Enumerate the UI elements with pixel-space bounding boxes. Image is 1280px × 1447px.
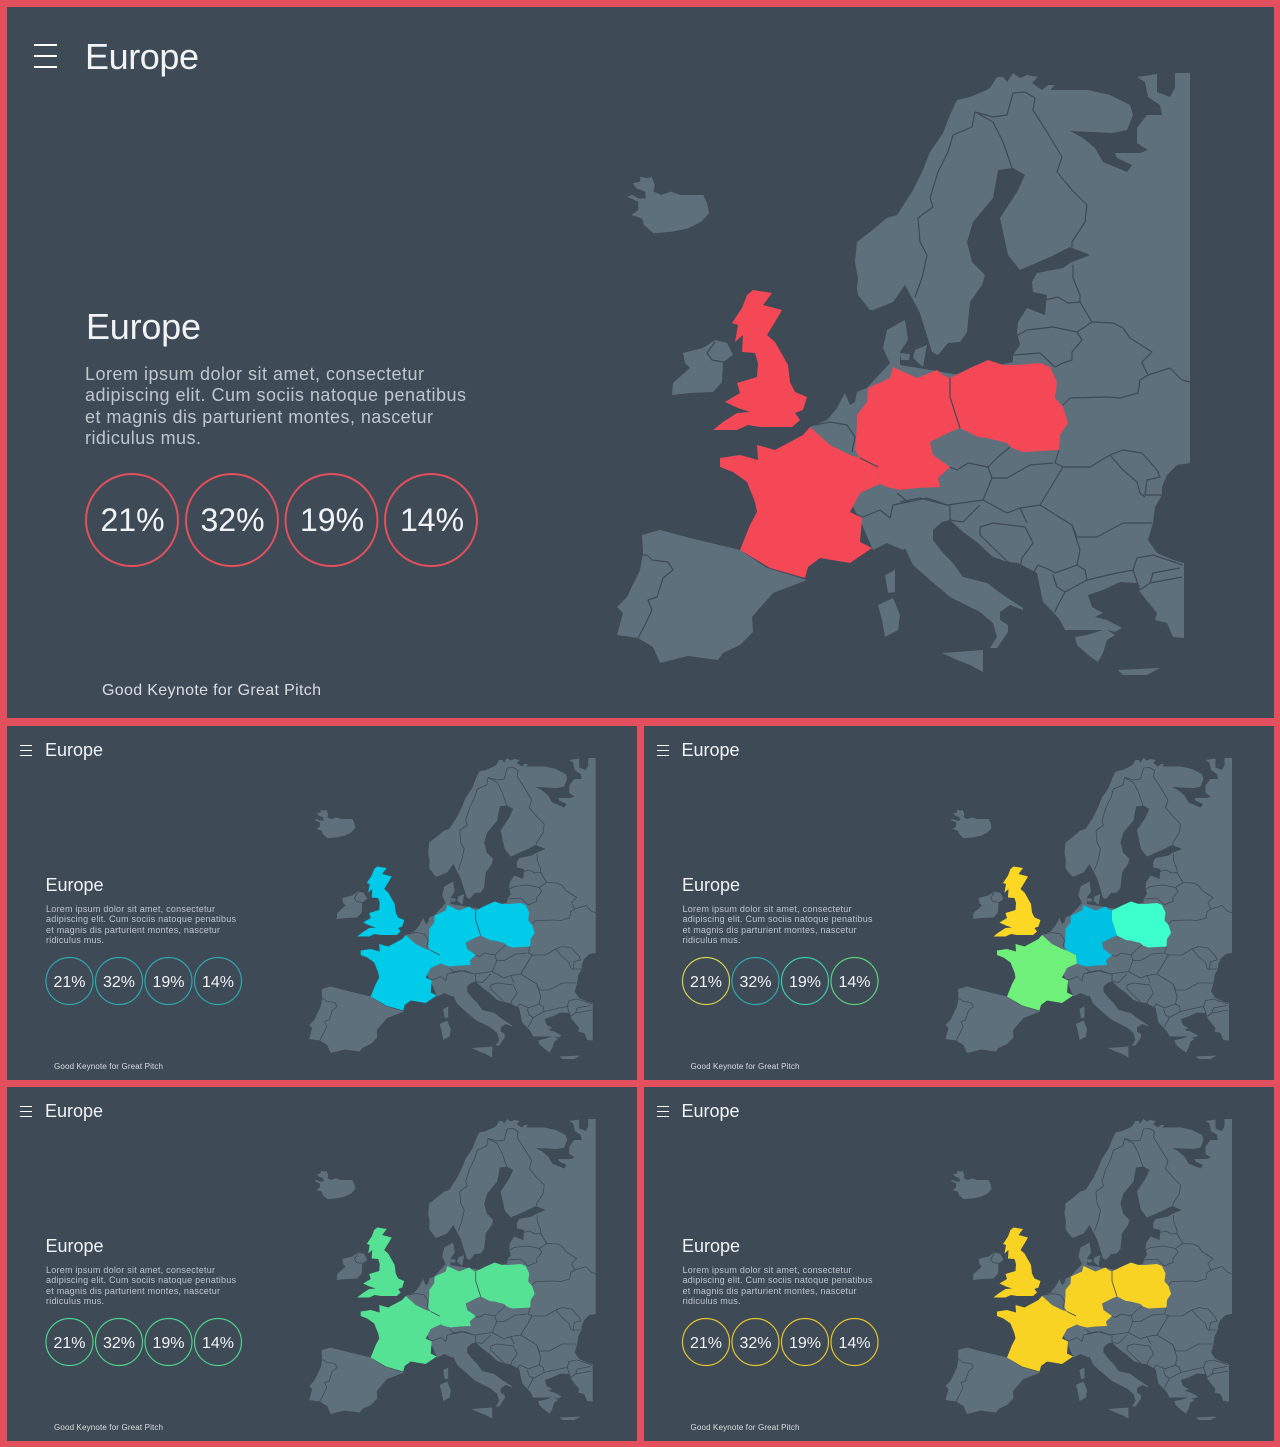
text block: et magnis dis parturient montes, nascetur xyxy=(85,407,433,427)
percentage values: 19% xyxy=(789,1335,821,1352)
icon: menu xyxy=(34,44,57,68)
text block: Lorem ipsum dolor sit amet, consectetur xyxy=(46,904,215,914)
text block xyxy=(682,1265,873,1306)
text block: et magnis dis parturient montes, nascetur xyxy=(682,1286,856,1296)
icon: menu xyxy=(657,1106,669,1117)
percentage values: 21% xyxy=(53,1335,86,1352)
text block: Lorem ipsum dolor sit amet, consectetur xyxy=(85,364,424,384)
footer: Good Keynote for Great Pitch xyxy=(690,1062,800,1071)
percentage values: 14% xyxy=(838,1335,871,1352)
footer: Good Keynote for Great Pitch xyxy=(102,682,321,699)
heading: Europe xyxy=(682,1236,740,1256)
percentage circles xyxy=(46,1318,242,1366)
heading: Europe xyxy=(46,875,104,895)
percentage values xyxy=(690,1335,871,1352)
panel: green slide xyxy=(7,1087,637,1441)
text block: adipiscing elit. Cum sociis natoque penatibus xyxy=(682,914,873,924)
text block xyxy=(46,904,236,945)
text block: et magnis dis parturient montes, nascetur xyxy=(682,925,856,935)
percentage values: 14% xyxy=(202,974,234,991)
title: Europe xyxy=(682,1101,740,1121)
panel: main red slide xyxy=(7,7,1274,718)
percentage values: 32% xyxy=(739,1335,772,1352)
percentage values: 14% xyxy=(838,974,871,991)
percentage values: 19% xyxy=(152,974,185,991)
footer: Good Keynote for Great Pitch xyxy=(54,1062,163,1071)
percentage values: 21% xyxy=(690,974,722,991)
title: Europe xyxy=(45,740,103,760)
percentage circles xyxy=(86,474,477,566)
text block: ridiculus mus. xyxy=(682,1296,740,1306)
icon: menu xyxy=(657,745,669,756)
percentage values: 32% xyxy=(103,974,135,991)
heading: Europe xyxy=(682,875,740,895)
panel: multicolour slide xyxy=(644,726,1274,1080)
panel: blue slide xyxy=(7,726,637,1080)
percentage circles xyxy=(46,958,242,1004)
title: Europe xyxy=(45,1101,103,1121)
percentage values xyxy=(53,1335,234,1352)
percentage values: 32% xyxy=(739,974,772,991)
map: Europe multicolour xyxy=(946,758,1232,1059)
text block: adipiscing elit. Cum sociis natoque penatibus xyxy=(682,1275,873,1285)
text block: ridiculus mus. xyxy=(46,935,104,945)
text block: Lorem ipsum dolor sit amet, consectetur xyxy=(682,904,852,914)
text block xyxy=(46,1265,236,1306)
percentage circles xyxy=(682,958,878,1004)
map: Europe green xyxy=(309,1119,596,1420)
percentage circles xyxy=(682,1318,878,1366)
percentage values: 32% xyxy=(103,1335,135,1352)
heading: Europe xyxy=(46,1236,104,1256)
icon: menu xyxy=(20,1106,32,1117)
text block: adipiscing elit. Cum sociis natoque penatibus xyxy=(46,1275,236,1285)
percentage values: 21% xyxy=(100,502,165,538)
title: Europe xyxy=(682,740,740,760)
text block: ridiculus mus. xyxy=(85,428,201,448)
panel: yellow slide xyxy=(644,1087,1274,1441)
map: Europe blue xyxy=(309,758,596,1059)
percentage values: 21% xyxy=(53,974,86,991)
percentage values: 19% xyxy=(789,974,821,991)
percentage values: 19% xyxy=(300,502,364,538)
text block xyxy=(682,904,873,945)
percentage values: 14% xyxy=(400,502,464,538)
title: Europe xyxy=(85,36,199,77)
text block: ridiculus mus. xyxy=(46,1296,104,1306)
percentage values xyxy=(690,974,871,991)
percentage values: 32% xyxy=(200,502,265,538)
text block: ridiculus mus. xyxy=(682,935,740,945)
percentage values xyxy=(100,502,464,538)
percentage values: 14% xyxy=(202,1335,234,1352)
map: Europe yellow xyxy=(946,1119,1232,1420)
icon: menu xyxy=(20,745,32,756)
text block: et magnis dis parturient montes, nascetur xyxy=(46,1286,220,1296)
text block: adipiscing elit. Cum sociis natoque penatibus xyxy=(85,385,466,405)
text block: adipiscing elit. Cum sociis natoque penatibus xyxy=(46,914,236,924)
footer: Good Keynote for Great Pitch xyxy=(690,1423,800,1432)
map: Europe red xyxy=(617,73,1190,675)
text block: et magnis dis parturient montes, nascetur xyxy=(46,925,220,935)
text block: Lorem ipsum dolor sit amet, consectetur xyxy=(46,1265,215,1275)
text block xyxy=(85,364,466,448)
percentage values: 19% xyxy=(152,1335,185,1352)
percentage values: 21% xyxy=(690,1335,722,1352)
text block: Lorem ipsum dolor sit amet, consectetur xyxy=(682,1265,852,1275)
heading: Europe xyxy=(86,306,201,347)
footer: Good Keynote for Great Pitch xyxy=(54,1423,163,1432)
percentage values xyxy=(53,974,234,991)
